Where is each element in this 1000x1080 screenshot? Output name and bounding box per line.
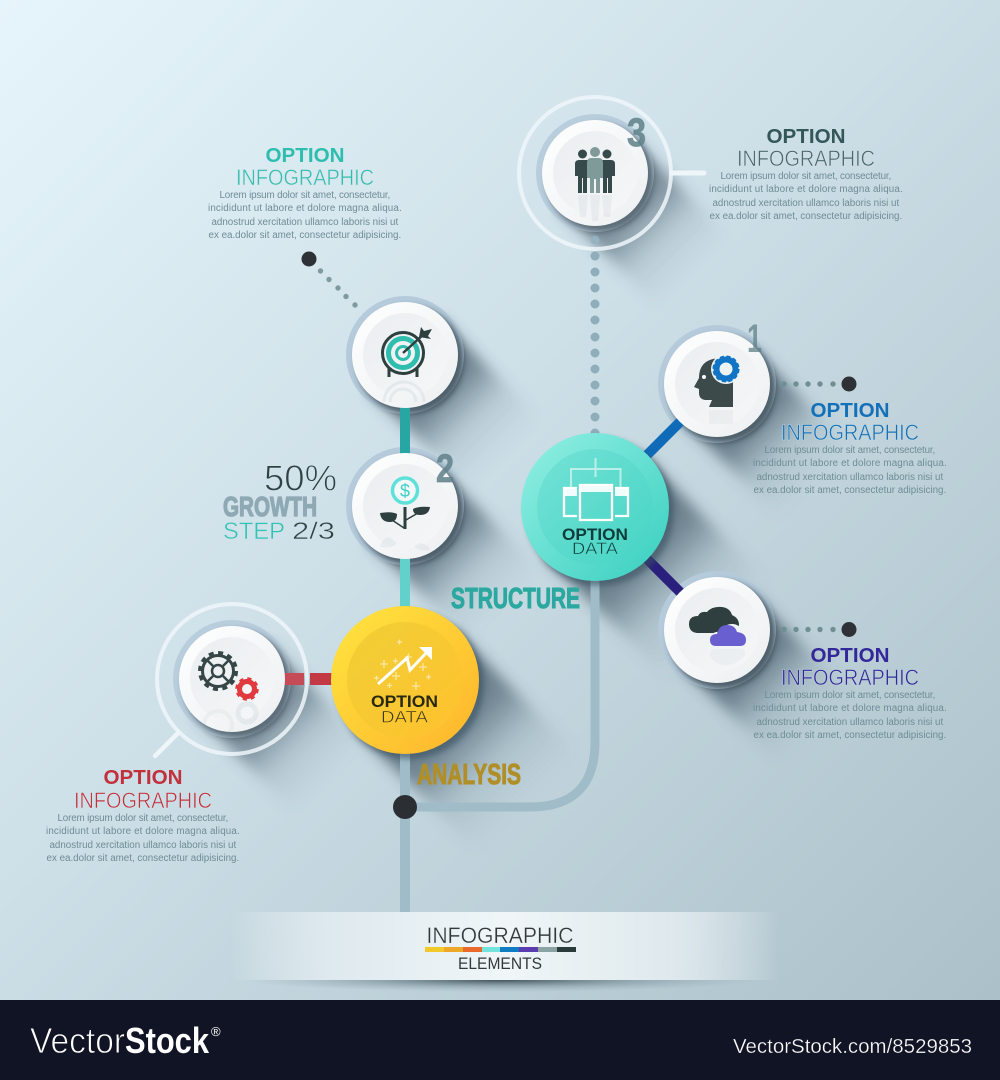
text block: option cloud: OPTION — [810, 645, 890, 667]
long shadows — [197, 138, 851, 853]
icon: target — [382, 327, 432, 402]
connector: red horizontal — [280, 673, 334, 685]
node: gears — [155, 604, 307, 756]
text block: option 3: Lorem ipsum dolor sit amet, consectetur, — [720, 171, 892, 182]
icon: head with gear — [694, 354, 741, 424]
icon: gears — [200, 653, 257, 739]
node: plant (step 2) — [352, 447, 458, 559]
text block: option head — [753, 400, 947, 496]
text block: option target: ex ea.dolor sit amet, consectetur adipisicing. — [208, 230, 402, 241]
node: yellow option data: DATA — [381, 708, 429, 726]
text block: option cloud: Lorem ipsum dolor sit amet, consectetur, — [764, 690, 936, 701]
connector: navy diagonal — [645, 557, 685, 597]
text block: option 3: ex ea.dolor sit amet, consectetur adipisicing. — [710, 211, 902, 222]
text block: option head: adnostrud xercitation ullamco laboris nisi ut — [756, 472, 944, 483]
dotted leader: target — [302, 252, 358, 308]
text block: option cloud — [753, 645, 947, 741]
text block: option target: Lorem ipsum dolor sit amet, consectetur, — [220, 190, 390, 201]
connector: light teal segment — [400, 552, 410, 612]
label: OPTION — [371, 693, 438, 711]
text block: option gears — [46, 767, 240, 864]
label: analysis: ANALYSIS — [417, 759, 521, 791]
text block: option gears: incididunt ut labore et dolore magna aliqua. — [46, 826, 240, 837]
text block: option 3: OPTION — [766, 126, 846, 148]
text block: 50% growth: 2/3 — [292, 518, 335, 545]
text block: option 3 — [709, 126, 903, 222]
text block: 50% growth: 50% — [264, 458, 337, 498]
text block: option target: incididunt ut labore et dolore magna aliqua. — [208, 203, 402, 214]
icon: people — [575, 147, 615, 221]
node: head (step 1) — [664, 317, 770, 437]
connector: curved branch to teal node — [405, 570, 595, 807]
icon: plant: $ — [400, 481, 410, 501]
text block: 50% growth: STEP — [223, 518, 285, 545]
text block: option gears: ex ea.dolor sit amet, consectetur adipisicing. — [46, 853, 240, 864]
url: VectorStock.com/8529853 — [733, 1036, 972, 1058]
banner title: INFOGRAPHIC — [426, 923, 574, 948]
text block: option head: Lorem ipsum dolor sit amet, consectetur, — [764, 445, 936, 456]
node: teal option data — [521, 433, 674, 586]
text block: option gears: adnostrud xercitation ullamco laboris nisi ut — [50, 840, 236, 851]
text block: 50% growth: GROWTH — [223, 491, 317, 522]
connector: blue diagonal — [645, 417, 685, 457]
node: yellow option data — [331, 606, 484, 759]
text block: option gears: OPTION — [104, 767, 182, 789]
dotted leader: head — [781, 376, 856, 392]
connector: dark teal segment — [400, 400, 410, 460]
halos and contact shadows — [173, 114, 776, 738]
banner subtitle: ELEMENTS — [458, 954, 542, 973]
node: teal option data: DATA — [572, 539, 619, 558]
ring tail — [672, 170, 704, 176]
connector: main vertical trunk — [400, 750, 410, 912]
outer ring — [157, 604, 307, 754]
text block: option target: INFOGRAPHIC — [236, 165, 374, 190]
number 1: 1 — [747, 317, 762, 361]
node: target — [352, 302, 458, 408]
outer ring — [519, 97, 671, 249]
text block: option target: adnostrud xercitation ullamco laboris nisi ut — [212, 217, 398, 228]
text block: option head: ex ea.dolor sit amet, consectetur adipisicing. — [754, 485, 946, 496]
text block: option cloud: incididunt ut labore et dolore magna aliqua. — [753, 703, 947, 714]
text block: option head: incididunt ut labore et dolore magna aliqua. — [753, 458, 947, 469]
text block: option 3: adnostrud xercitation ullamco laboris nisi ut — [712, 198, 900, 209]
icon: hierarchy — [564, 458, 628, 520]
text block: option head: INFOGRAPHIC — [781, 420, 919, 445]
text block: option 3: INFOGRAPHIC — [737, 146, 875, 171]
banner shadow — [245, 980, 755, 1004]
number 2: 2 — [436, 447, 454, 491]
footer bar — [0, 1000, 1000, 1080]
text block: option target: OPTION — [266, 145, 344, 167]
color bar — [425, 947, 576, 952]
text block: option cloud: ex ea.dolor sit amet, consectetur adipisicing. — [754, 730, 946, 741]
text block: option head: OPTION — [810, 400, 890, 422]
label: OPTION — [562, 526, 628, 544]
text block: option cloud: adnostrud xercitation ullamco laboris nisi ut — [756, 717, 944, 728]
icon: rising arrow — [374, 640, 432, 690]
dotted line to node 3 — [590, 236, 600, 438]
ring tail — [155, 733, 178, 756]
banner — [230, 912, 780, 980]
text block: option cloud: INFOGRAPHIC — [781, 665, 919, 690]
logo: VectorStock — [30, 1020, 210, 1061]
text block: option 3: incididunt ut labore et dolore magna aliqua. — [709, 184, 903, 195]
text block: 50% growth — [223, 458, 337, 545]
node: people (step 3) — [519, 97, 704, 249]
text block: option gears: INFOGRAPHIC — [74, 788, 212, 813]
label: structure: STRUCTURE — [451, 583, 580, 615]
dotted leader: cloud — [781, 622, 856, 637]
registered mark: ® — [211, 1024, 221, 1039]
text block: option target — [208, 145, 402, 241]
text block: option gears: Lorem ipsum dolor sit amet, consectetur, — [58, 813, 228, 824]
node: clouds — [664, 577, 770, 683]
icon: clouds — [689, 607, 747, 665]
junction dot — [393, 795, 417, 819]
number 3: 3 — [627, 111, 646, 155]
